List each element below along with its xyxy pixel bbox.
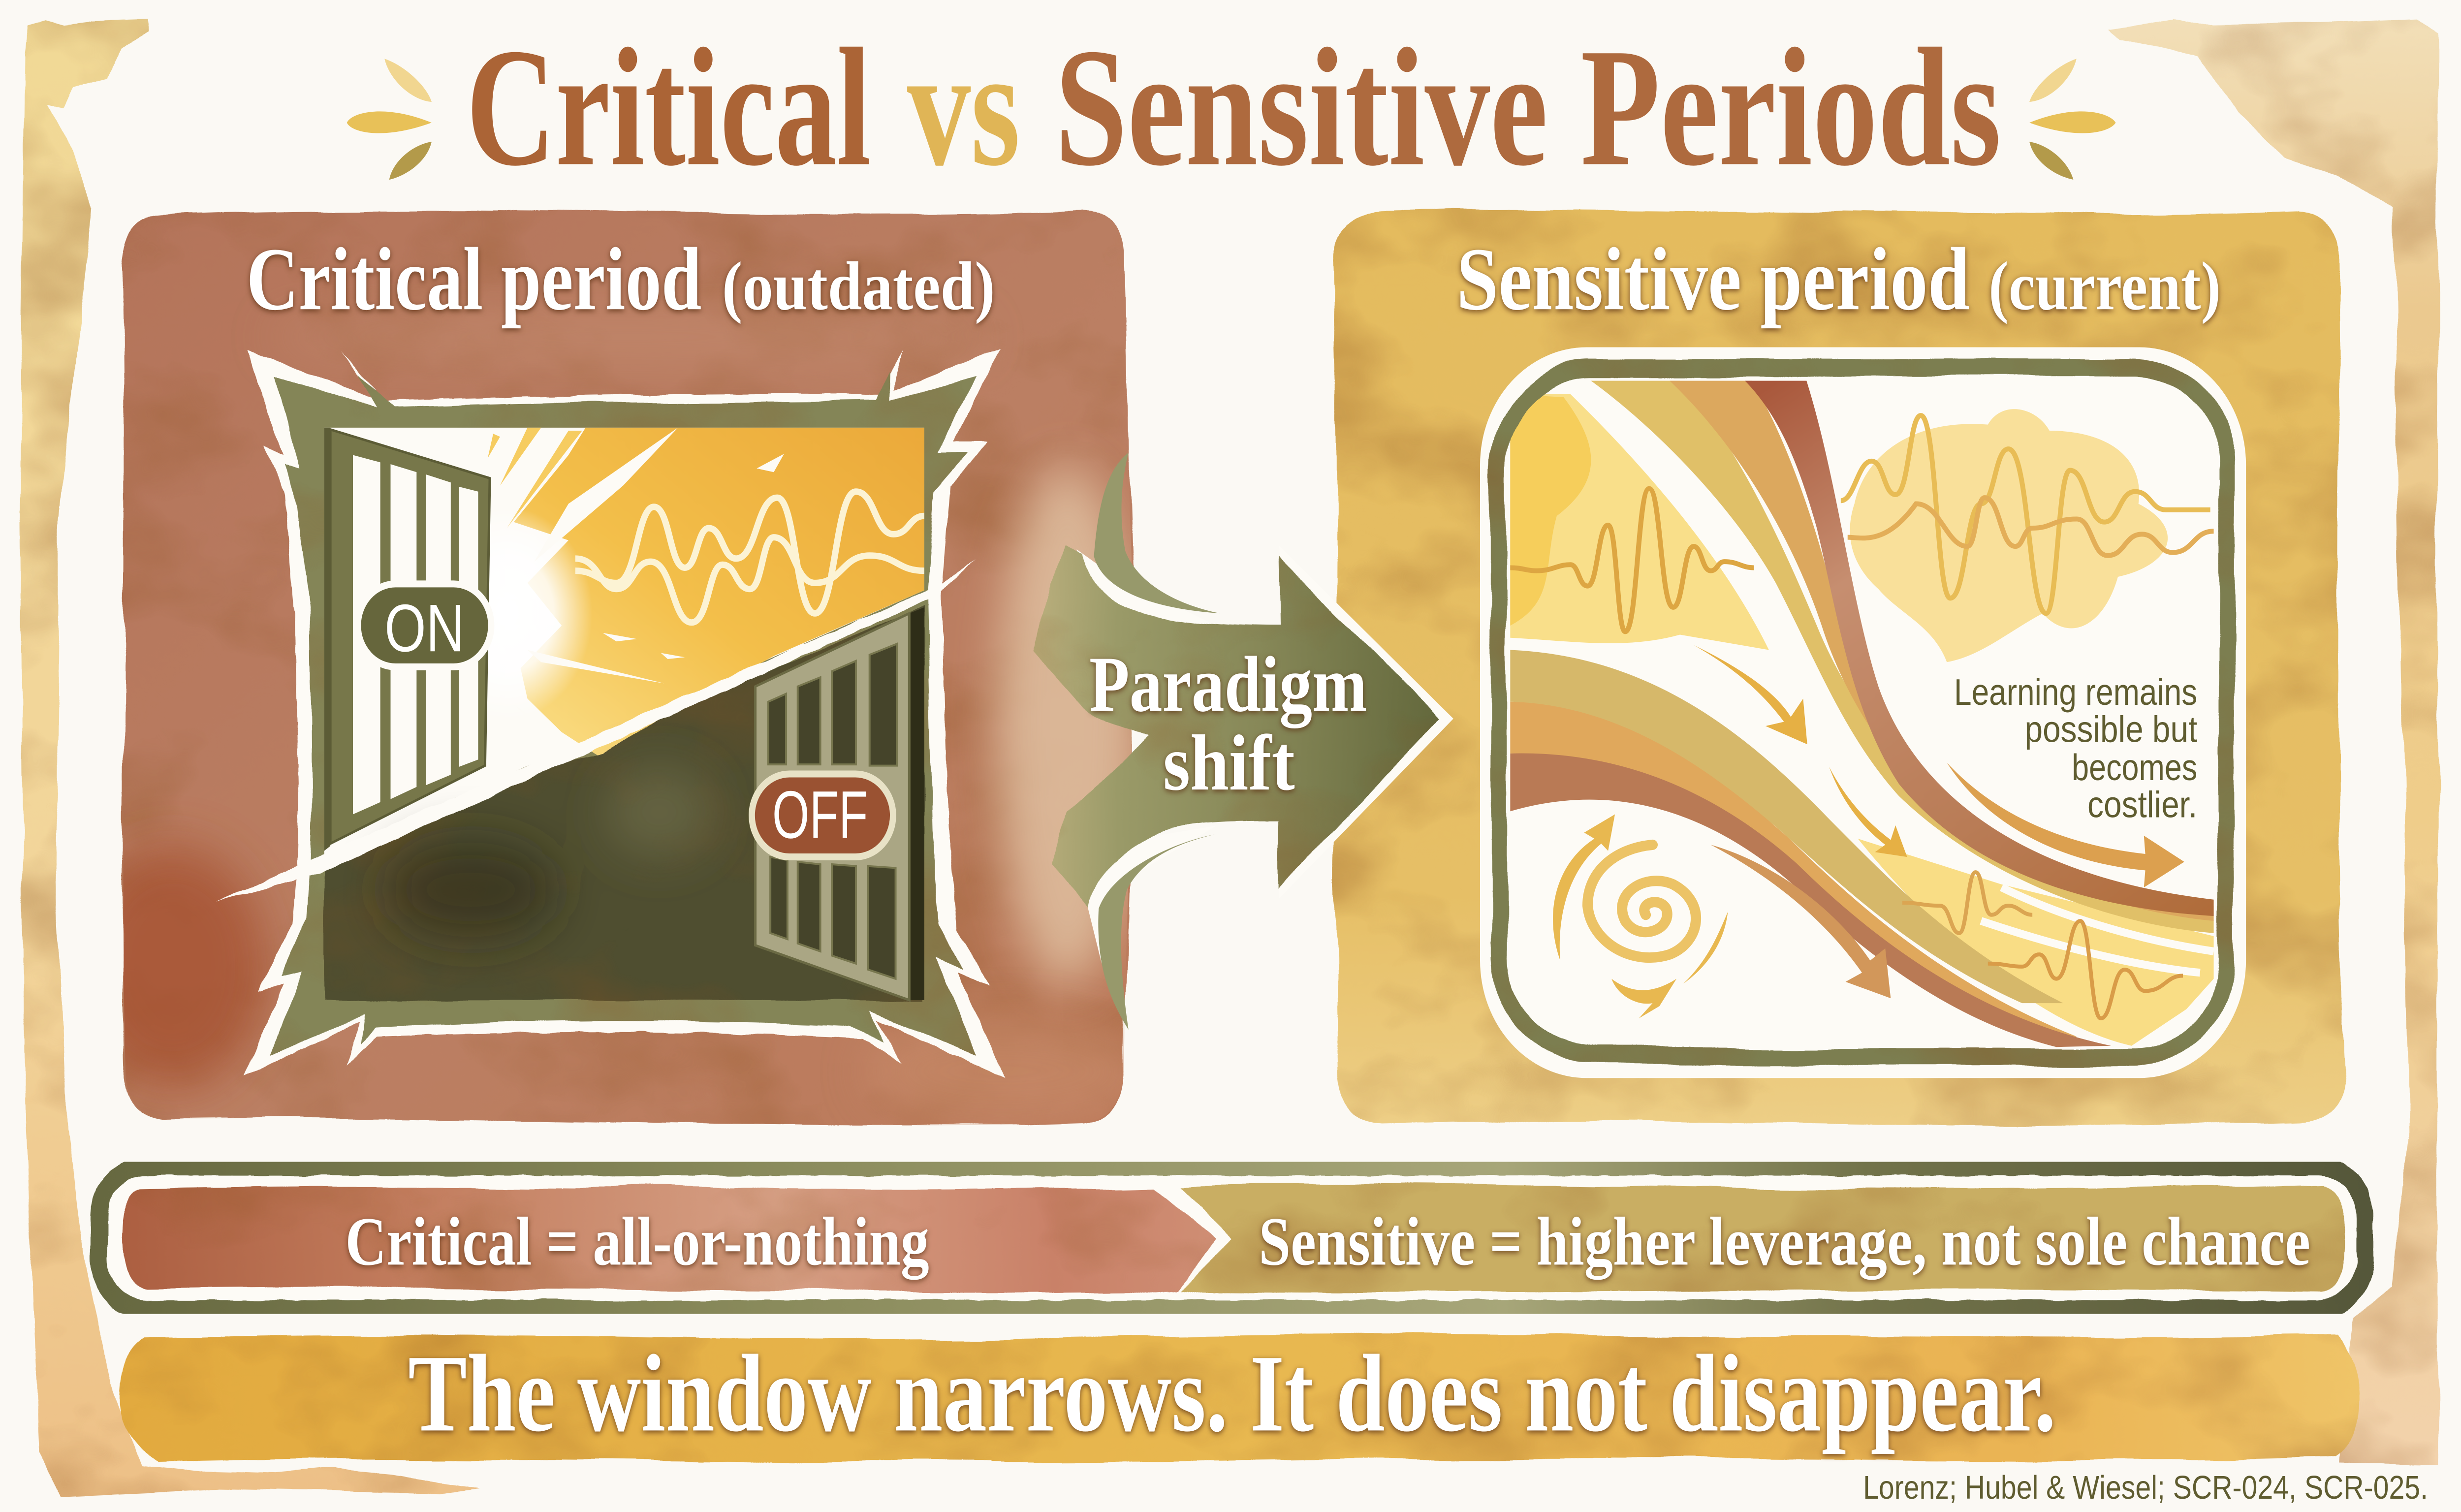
ON pill [355,580,494,670]
stream: lower brown band [1510,753,2111,1047]
arrow head halo [1279,546,1453,898]
waveform: top right lower [1848,498,2214,556]
stream: pale yellow wash left [1510,394,1769,650]
left watercolor border [20,19,479,1496]
stream: lower tan band [1510,702,2077,1040]
rounded frame halo [1480,347,2246,1078]
lower flare [1088,826,1216,964]
ON pill: ON [384,591,465,666]
panel background wash [1334,209,2345,1126]
olive door frame [271,370,979,1055]
icon: spiral with cycle arrows [1587,845,1696,958]
takeaway banner [119,1332,2359,1462]
white diagonal slash [217,560,976,902]
critical arrow segment [121,1187,1216,1292]
caption: learning remains possible: Learning remains [1954,672,2197,713]
waves [575,492,924,613]
closed door with bars [756,607,924,1000]
flowing streams illustration [1510,381,2214,1047]
icon: left title leaves [347,59,432,180]
arrow body [1034,544,1439,907]
dark smoke blotches [384,769,714,938]
right watercolor border [2108,17,2437,1465]
waveform: left [1510,489,1754,631]
waveform: lower middle [1902,872,2032,933]
caption: learning remains possible: costlier. [2087,784,2197,825]
stream: top brown band [1745,381,2214,916]
title: Sensitive Periods [1055,14,2001,201]
arrow label: Paradigm [1089,641,1367,728]
upper flare [1077,549,1216,626]
citation: Lorenz; Hubel & Wiesel; SCR-024, SCR-025. [1863,1469,2428,1506]
stream: pale yellow wash lower right [1858,839,2214,1046]
yellow light wash [514,428,924,756]
arrow: paradigm shift [1034,453,1453,1030]
caption: learning remains possible [1954,672,2197,825]
OFF pill: OFF [772,777,868,852]
heading: sensitive period: Sensitive period [1456,229,1970,329]
heading: critical period: Critical period [247,229,701,329]
title [466,14,2001,201]
heading: sensitive period: (current) [1988,248,2221,325]
stream: top tan band [1670,381,2214,921]
panel background wash [123,211,1133,1126]
arrow label [1089,641,1367,807]
critical label: Critical = all-or-nothing [346,1203,929,1280]
heading: critical period [247,229,995,329]
title: Critical [466,14,871,201]
title: vs [907,14,1020,201]
arrows [1694,645,1807,744]
pale yellow blob [1850,409,2168,662]
stream: lower gold band [1510,650,2063,1003]
waveform: top right upper [1841,415,2210,613]
caption: learning remains possible: becomes [2072,747,2197,788]
upper half: open window [324,428,924,856]
panel: sensitive period [1334,209,2345,1126]
sensitive segment [1180,1185,2346,1292]
lower half: dark closed window [324,607,924,1000]
OFF pill [749,770,896,860]
stream: top olive-gold band [1591,381,2214,933]
waveform: lower right [1988,921,2183,1018]
heading: critical period: (outdated) [722,248,995,325]
open door with bars [324,428,490,851]
sensitive label: Sensitive = higher leverage, not sole chance [1259,1203,2310,1280]
banner text: The window narrows. It does not disappear. [408,1332,2056,1455]
outer olive capsule [99,1166,2365,1310]
banner wash [119,1335,2359,1462]
icon: right title leaves [2029,59,2115,180]
rounded olive frame [1499,368,2227,1056]
comparison bar [99,1166,2365,1310]
panel: critical period [78,211,1146,1126]
spiked white frame outline [244,348,1005,1077]
arrow label: shift [1163,720,1295,807]
caption: learning remains possible: possible but [2025,709,2197,750]
